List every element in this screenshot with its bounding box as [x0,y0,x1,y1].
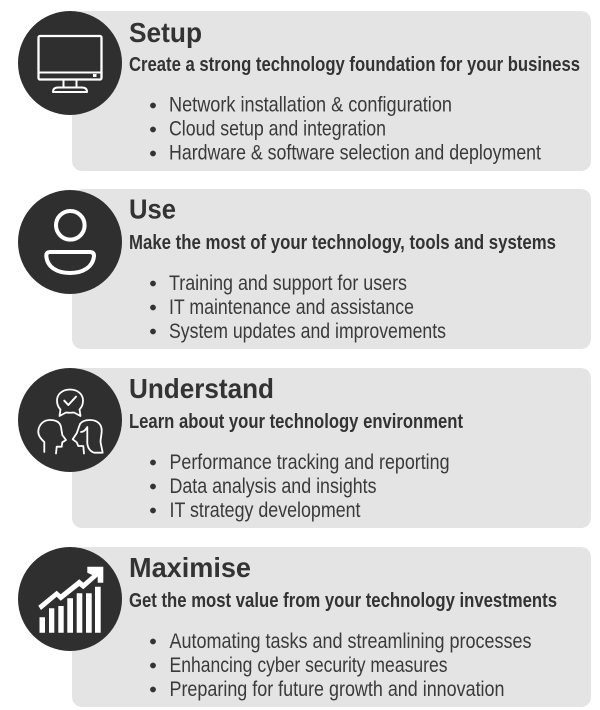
heading: Use: Use [129,194,176,224]
icon: user [18,190,122,294]
heading: Setup: Setup [129,17,202,48]
bullet list: Setup [150,94,541,164]
bullet list: Setup: Network installation & configuration [169,94,452,116]
bullet list: Understand [150,451,450,522]
bullet list: Understand: IT strategy development [170,499,361,522]
bullet list: Understand: Performance tracking and reporting [170,451,450,474]
bullet list: Use: Training and support for users [169,272,407,295]
icon: desktop monitor [18,11,122,115]
heading: Maximise: Maximise [129,552,251,583]
panel: Maximise [18,547,591,707]
panel: Use [18,189,591,349]
panel: Understand [18,368,591,528]
bullet list: Understand: Data analysis and insights [170,475,376,498]
bullet list: Use: System updates and improvements [169,320,446,343]
heading: Understand: Understand [129,373,274,404]
bullet list: Maximise [150,630,532,701]
subheading: Understand: Learn about your technology environment [129,411,463,433]
panel: Setup [18,11,591,171]
bullet list: Setup: Hardware & software selection and deployment [169,142,541,164]
bullet list: Maximise: Enhancing cyber security measures [170,654,448,677]
bullet list: Use: IT maintenance and assistance [169,296,414,319]
icon: growth chart [18,547,122,651]
bullet list: Use [150,272,446,343]
bullet list: Maximise: Automating tasks and streamlining processes [170,630,532,653]
icon: two people talking [18,368,122,472]
bullet list: Setup: Cloud setup and integration [169,118,386,140]
bullet list: Maximise: Preparing for future growth and innovation [170,678,504,701]
